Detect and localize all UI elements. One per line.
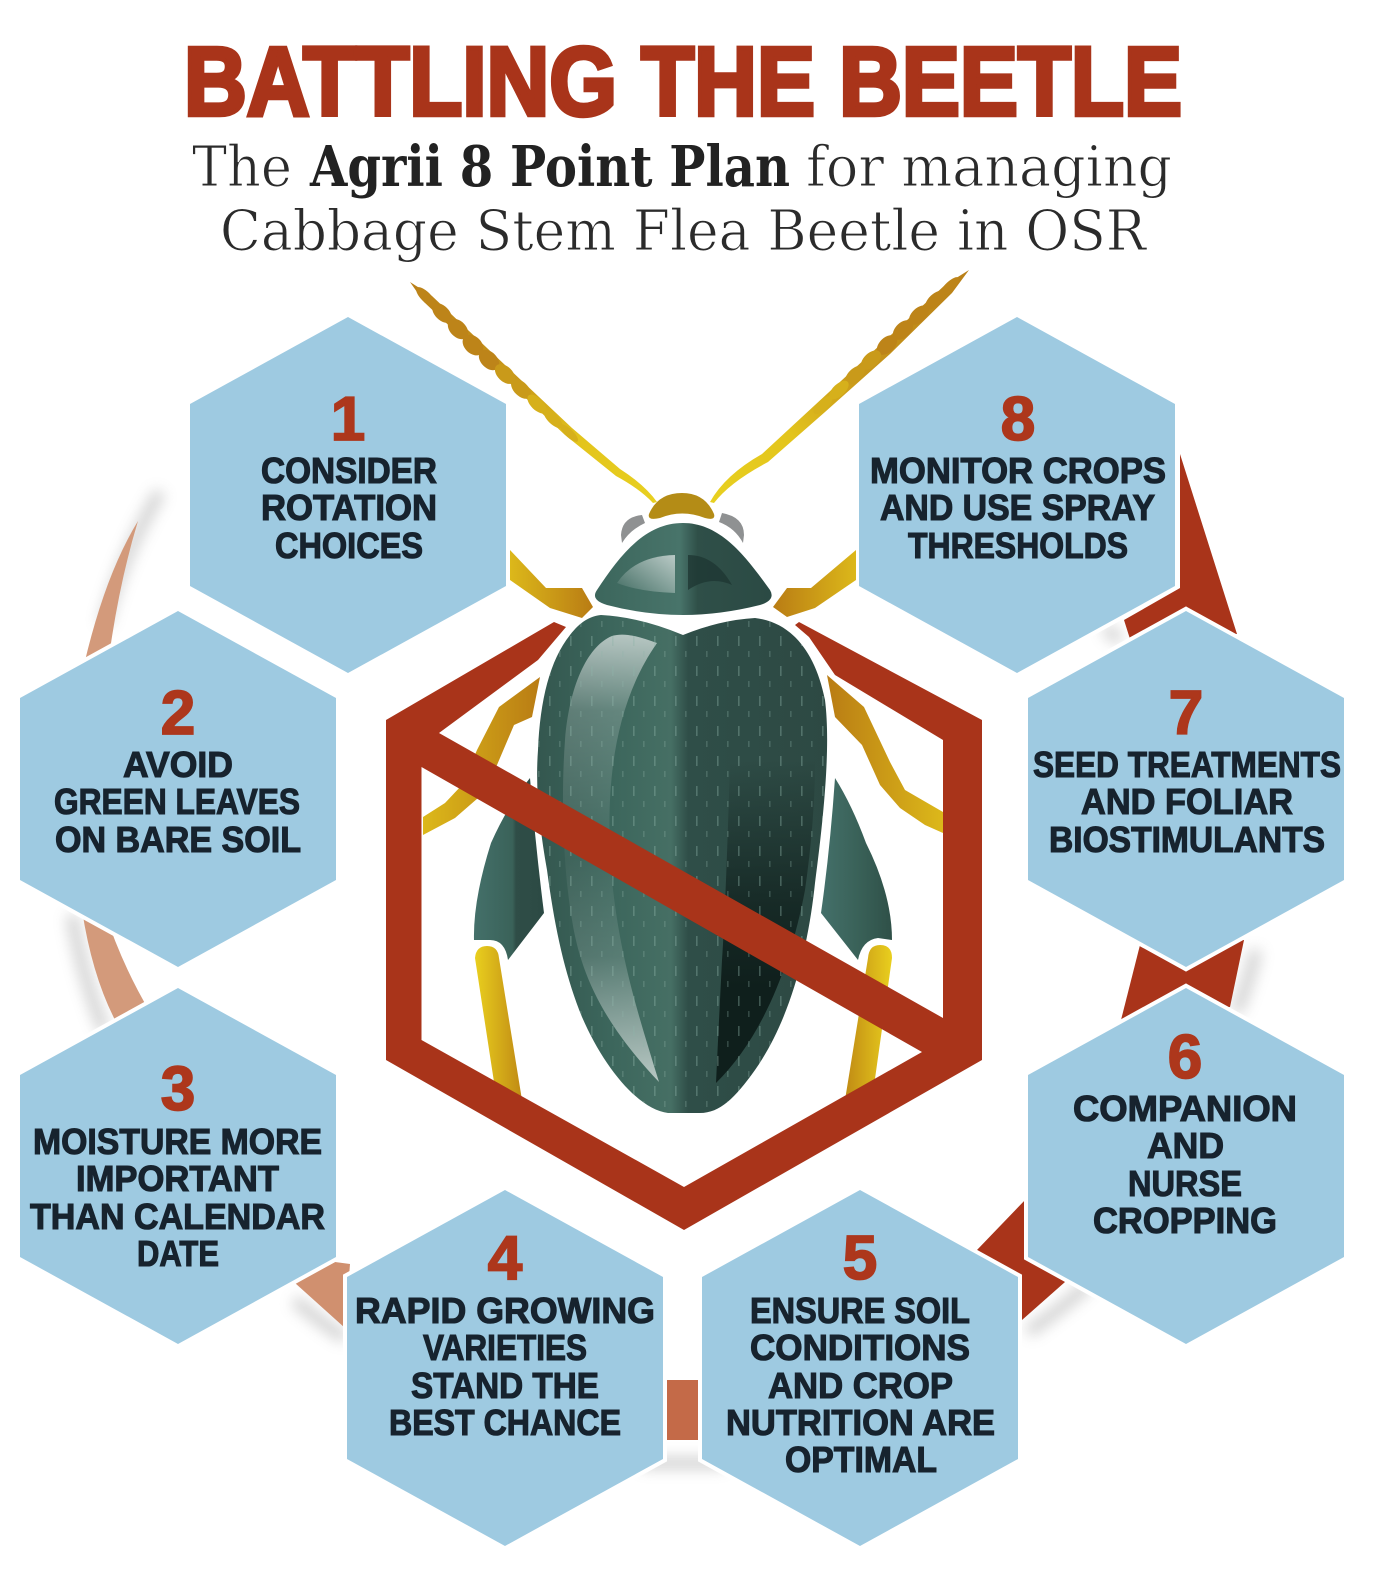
front legs (510, 550, 856, 618)
label 1: ROTATION (261, 487, 437, 528)
label 5: OPTIMAL (785, 1439, 937, 1480)
label 5: NUTRITION ARE (726, 1402, 995, 1443)
subtitle (192, 134, 1172, 264)
label 7: AND FOLIAR (1081, 781, 1293, 822)
label 3: DATE (137, 1233, 219, 1274)
label 6: CROPPING (1093, 1200, 1277, 1241)
label 5 (726, 1290, 995, 1480)
ring shadow (72, 492, 1256, 1463)
ring: faded left segments (82, 521, 705, 1440)
subtitle: Cabbage Stem Flea Beetle in OSR (220, 199, 1148, 264)
number 1: 1 (331, 385, 365, 454)
label 6 (1073, 1088, 1297, 1241)
number 2: 2 (161, 679, 195, 748)
label 6: NURSE (1128, 1163, 1242, 1204)
ring: red right segments (976, 454, 1244, 1320)
label 7: SEED TREATMENTS (1033, 744, 1341, 785)
label 4: STAND THE (411, 1365, 599, 1406)
label 2 (54, 744, 301, 860)
label 5: AND CROP (768, 1365, 953, 1406)
hexagon 6 (1028, 988, 1344, 1344)
hexagon 1 (190, 317, 506, 673)
label 1 (261, 450, 437, 566)
label 4: BEST CHANCE (389, 1402, 621, 1443)
hexagon 8 (859, 317, 1175, 673)
label 5: ENSURE SOIL (750, 1290, 970, 1331)
title: BATTLING THE BEETLE (184, 27, 1182, 136)
label 8: AND USE SPRAY (880, 487, 1155, 528)
subtitle: for managing (806, 135, 1172, 200)
label 6: AND (1147, 1125, 1224, 1166)
number 3: 3 (161, 1055, 195, 1124)
hexagon 7 (1028, 611, 1344, 967)
label 6: COMPANION (1073, 1088, 1297, 1129)
label 7: BIOSTIMULANTS (1049, 819, 1325, 860)
subtitle: Agrii 8 Point Plan (309, 134, 790, 200)
label 2: GREEN LEAVES (54, 781, 300, 822)
label 8 (870, 450, 1166, 566)
hexagon 4 (347, 1190, 663, 1546)
label 4: RAPID GROWING (355, 1290, 655, 1331)
label 3: THAN CALENDAR (30, 1196, 325, 1237)
label 5: CONDITIONS (750, 1327, 970, 1368)
label 4 (355, 1290, 655, 1443)
number 5: 5 (843, 1224, 877, 1293)
label 7 (1033, 744, 1341, 860)
label 3: IMPORTANT (76, 1158, 279, 1199)
label 1: CHOICES (275, 525, 423, 566)
number 8: 8 (1001, 385, 1035, 454)
label 3: MOISTURE MORE (33, 1121, 322, 1162)
pronotum (595, 523, 772, 615)
beetle illustration (410, 270, 969, 1120)
label 8: THRESHOLDS (908, 525, 1128, 566)
elytra (530, 610, 830, 1120)
hind legs (474, 778, 892, 1100)
left antenna (410, 282, 657, 503)
clypeus (649, 493, 714, 519)
prohibition hexagon (386, 622, 982, 1230)
number 7: 7 (1169, 679, 1203, 748)
label 3 (30, 1121, 325, 1274)
number 6: 6 (1168, 1023, 1202, 1092)
label 4: VARIETIES (423, 1327, 587, 1368)
label 2: ON BARE SOIL (55, 819, 301, 860)
hexagon 3 (20, 988, 336, 1344)
number 4: 4 (488, 1224, 523, 1293)
label 2: AVOID (123, 744, 233, 785)
subtitle: The (192, 135, 292, 200)
right antenna (710, 270, 969, 503)
label 1: CONSIDER (261, 450, 437, 491)
eyes (621, 513, 744, 543)
middle legs (423, 675, 943, 835)
hexagon 5 (702, 1190, 1018, 1546)
hexagon 2 (20, 611, 336, 967)
label 8: MONITOR CROPS (870, 450, 1166, 491)
